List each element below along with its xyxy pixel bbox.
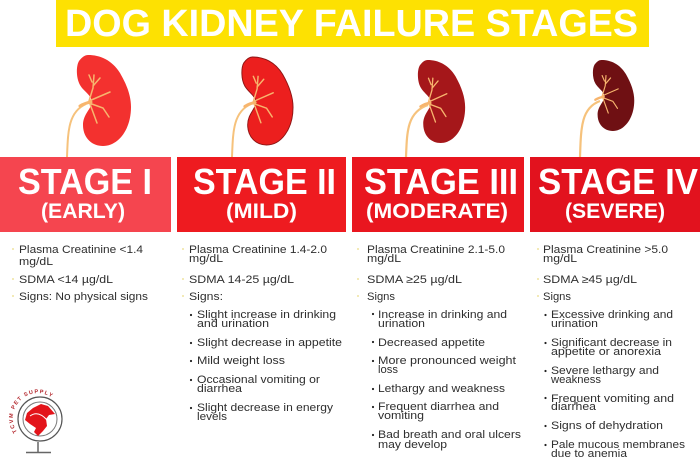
kidney: stage I [67,55,131,157]
text block: stage II details: levels [197,411,228,423]
text block: stage II details [182,244,342,423]
stage I header: (EARLY) [41,200,125,223]
text block: stage III details: vomiting [378,410,424,422]
text block: stage IV details: Severe lethargy and [551,365,659,377]
text block: stage III details: Plasma Creatinine 2.1-5.0 [367,244,505,256]
kidney: stage II [232,57,293,157]
text block: stage III details: may develop [378,439,447,451]
title banner: DOG KIDNEY FAILURE STAGES [65,3,638,45]
stage II header: STAGE II [193,161,336,202]
stage IV header: (SEVERE) [565,200,665,223]
text block: stage III details [357,244,522,451]
text block: stage IV details: urination [551,318,598,330]
text block: stage II details: Mild weight loss [197,355,286,367]
logo: pet supply globe [8,389,63,454]
text block: stage II details: mg/dL [189,253,223,265]
text block: stage I details [12,244,149,303]
text block: stage IV details: Significant decrease in [551,337,672,349]
stage IV header [530,157,700,232]
kidney: stage III [406,60,465,157]
text block: stage I details: mg/dL [19,256,53,268]
text block: stage III details: Increase in drinking and [378,309,507,321]
text block: stage IV details: SDMA ≥45 µg/dL [543,274,637,286]
text block: stage I details: Signs: No physical signs [19,291,149,303]
text block: stage IV details: Frequent vomiting and [551,393,674,405]
text block: stage III details: Bad breath and oral ulcers [378,429,522,441]
text block: stage IV details: weakness [550,374,602,386]
text block: stage II details: Signs: [189,291,223,303]
text block: stage III details: Lethargy and weakness [378,383,506,395]
text block: stage I details: Plasma Creatinine <1.4 [19,244,143,256]
text block: stage IV details: due to anemia [551,448,628,460]
text block: stage IV details: Pale mucous membranes [551,439,686,451]
stage II header: (MILD) [226,200,297,223]
stage IV header: STAGE IV [538,161,698,202]
text block: stage I details: SDMA <14 µg/dL [19,274,113,286]
stage III header [352,157,524,232]
text block: stage III details: loss [378,364,399,376]
text block: stage III details: SDMA ≥25 µg/dL [367,274,462,286]
text block: stage III details: Signs [367,291,395,303]
stage II header [177,157,346,232]
text block: stage IV details: Plasma Creatinine >5.0 [543,244,668,256]
text block: stage III details: Decreased appetite [378,337,485,349]
text block: stage II details: SDMA 14-25 µg/dL [189,274,294,286]
text block: stage II details: Slight decrease in appetite [197,337,342,349]
text block: stage II details: Slight decrease in energy [197,402,334,414]
text block: stage IV details: Signs [543,291,571,303]
text block: stage III details: urination [378,318,425,330]
text block: stage IV details: Signs of dehydration [551,420,663,432]
text block: stage III details: More pronounced weight [378,355,516,367]
stage III header: (MODERATE) [366,200,508,223]
text block: stage II details: and urination [197,318,269,330]
kidney: stage IV [580,60,634,157]
text block: stage II details: Plasma Creatinine 1.4-2.0 [189,244,327,256]
logo: pet supply globe: TCVM PET SUPPLY [8,389,54,434]
text block: stage II details: diarrhea [197,383,243,395]
text block: stage III details: mg/dL [367,253,401,265]
stage I header [0,157,171,232]
text block: stage IV details [537,244,686,460]
text block: stage II details: Slight increase in drinking [197,309,336,321]
text block: stage IV details: Excessive drinking and [551,309,673,321]
text block: stage II details: Occasional vomiting or [197,374,320,386]
text block: stage III details: Frequent diarrhea and [378,401,499,413]
text block: stage IV details: appetite or anorexia [551,346,662,358]
text block: stage IV details: diarrhea [551,401,597,413]
text block: stage IV details: mg/dL [543,253,577,265]
stage I header: STAGE I [18,161,152,202]
stage III header: STAGE III [364,161,518,202]
